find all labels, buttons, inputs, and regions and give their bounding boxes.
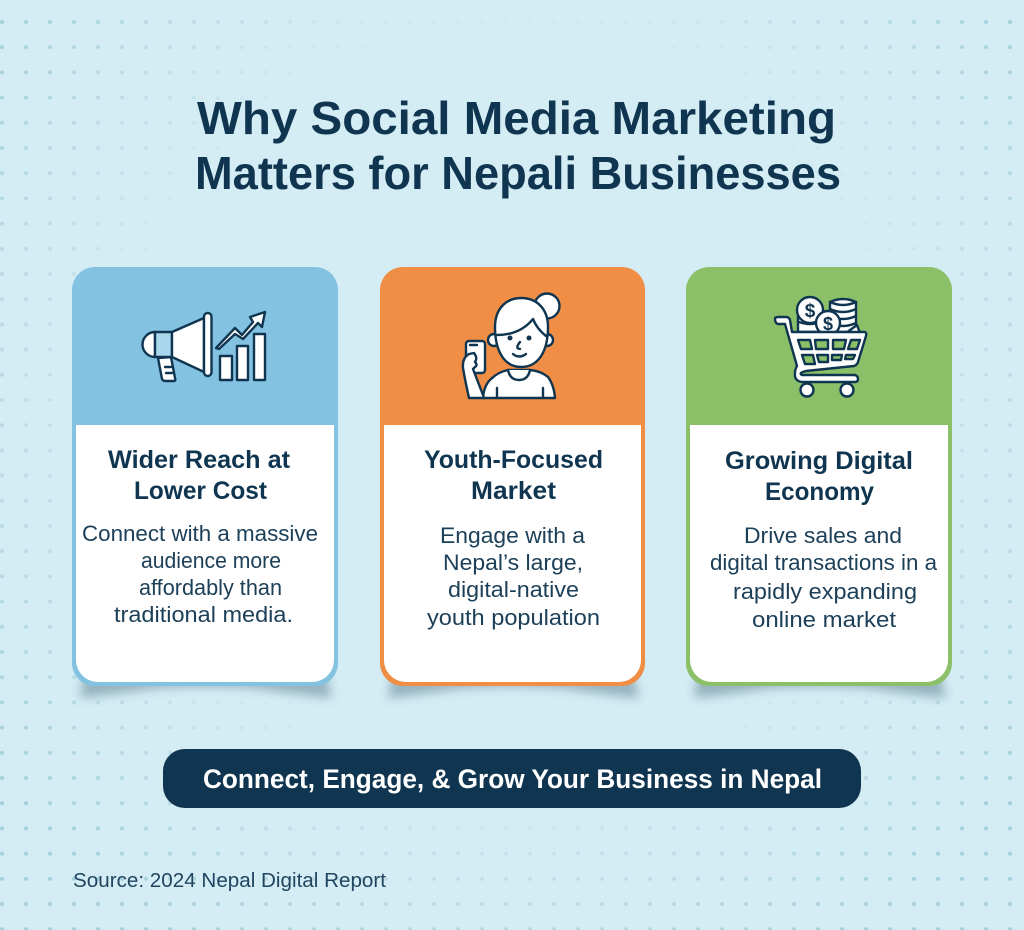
text block: Drive sales and — [744, 523, 902, 548]
panel: growing digital economy — [686, 267, 952, 698]
heading: Market — [471, 477, 557, 505]
banner: call to action — [163, 749, 861, 808]
text block: digital-native — [448, 577, 579, 602]
source note: Source: 2024 Nepal Digital Report — [73, 870, 386, 892]
title: Matters for Nepali Businesses — [195, 147, 841, 199]
panel: youth-focused market — [380, 267, 645, 698]
heading — [725, 447, 913, 506]
text block: youth population — [427, 605, 600, 630]
icon: shopping cart with coins: $ — [823, 314, 833, 334]
heading: Youth-Focused — [424, 446, 603, 474]
text block: traditional media. — [114, 602, 293, 627]
heading — [108, 446, 291, 505]
title: Why Social Media Marketing — [197, 92, 836, 144]
icon: shopping cart with coins — [775, 297, 866, 396]
text block: Connect with a massive — [82, 521, 318, 546]
icon: megaphone and growth chart — [142, 312, 265, 381]
text block: Nepal’s large, — [443, 550, 583, 575]
text block: affordably than — [139, 575, 282, 600]
heading: Wider Reach at — [108, 446, 291, 474]
text block — [427, 523, 600, 630]
heading: Economy — [765, 478, 874, 506]
text block — [82, 521, 318, 627]
text block — [710, 523, 937, 632]
panel: wider reach at lower cost — [72, 267, 338, 698]
heading — [424, 446, 603, 505]
text block: audience more — [141, 548, 281, 573]
heading: Lower Cost — [134, 477, 268, 505]
text block: rapidly expanding — [733, 579, 917, 604]
heading: Growing Digital — [725, 447, 913, 475]
icon: person holding phone — [463, 294, 560, 398]
icon: shopping cart with coins: $ — [805, 301, 816, 322]
title — [195, 92, 841, 199]
banner: call to action: Connect, Engage, & Grow Your Business in Nepal — [203, 764, 822, 794]
text block: digital transactions in a — [710, 550, 937, 575]
text block: Engage with a — [440, 523, 585, 548]
text block: online market — [752, 607, 897, 632]
